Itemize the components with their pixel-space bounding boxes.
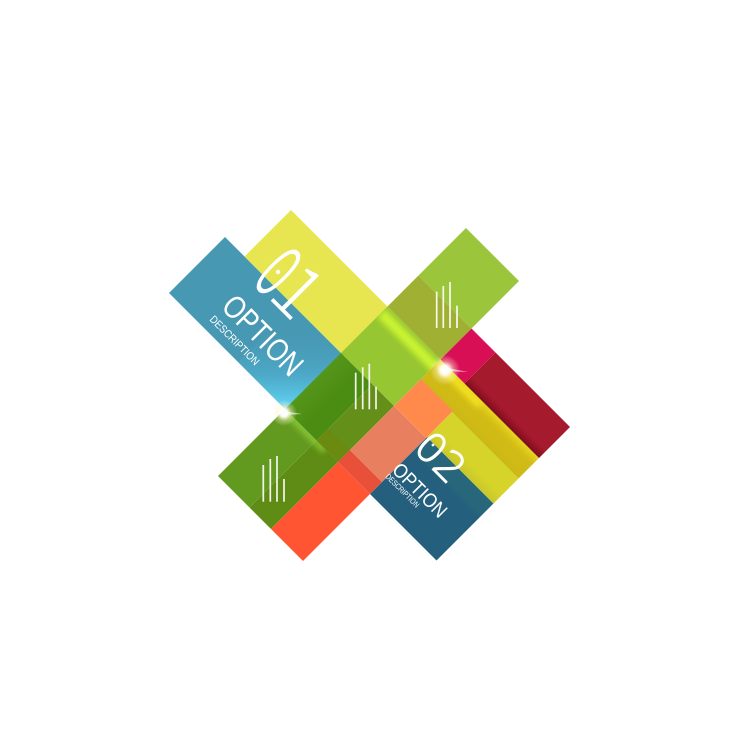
panel: magenta ribbon section [440,328,496,384]
text: option 2 number: 02 [405,422,476,493]
icon: bar lines upper right [437,282,457,328]
green ribbon crossing shadow [316,428,350,462]
glow: sparkle upper right [430,355,468,385]
blue ribbon highlight [238,306,344,412]
glow: streak on dark yellow [436,362,480,406]
panel: dark yellow ribbon [420,360,539,478]
text: option 2 description: DESCRIPTION [384,472,421,510]
green ribbon dark overlap upper [285,353,372,440]
orange ribbon bright overlap [394,379,453,438]
panel: yellow ribbon [244,210,390,356]
green ribbon bright overlap [341,306,440,406]
icon: bar lines lower left [263,456,284,502]
orange ribbon crossing shadow [338,450,382,494]
panel: red orange ribbon end [271,462,370,561]
cross of coloured ribbons [102,112,618,628]
orange ribbon salmon overlap [350,406,426,482]
icon: bar lines centre [356,364,376,409]
icon: dot inside zero of 01 [276,270,280,274]
panel: blue option 1 ribbon [169,237,344,412]
text: option 2 heading: OPTION [387,459,451,523]
green ribbon lower end, lower half [250,440,338,529]
panel: lemon ribbon [427,412,518,504]
panel: teal option 2 ribbon [370,437,494,560]
glow: streak on bright green [381,313,438,370]
text: option 1 heading: OPTION [215,287,311,383]
glow: streak on lower green [288,414,325,451]
text: option 1 number: 0 [238,233,317,312]
green ribbon dark overlap lower [316,384,394,462]
panel: green ribbon upper end [418,228,519,328]
text: option 1 description: DESCRIPTION [207,314,261,368]
text: option 1 number: 1 [250,237,353,339]
icon: dot inside zero of 02 [432,444,434,446]
green ribbon olive overlap [388,276,472,360]
panel: crimson ribbon [464,352,570,458]
green ribbon lower end, upper half [218,409,316,508]
glow: sparkle lower left [271,400,302,426]
